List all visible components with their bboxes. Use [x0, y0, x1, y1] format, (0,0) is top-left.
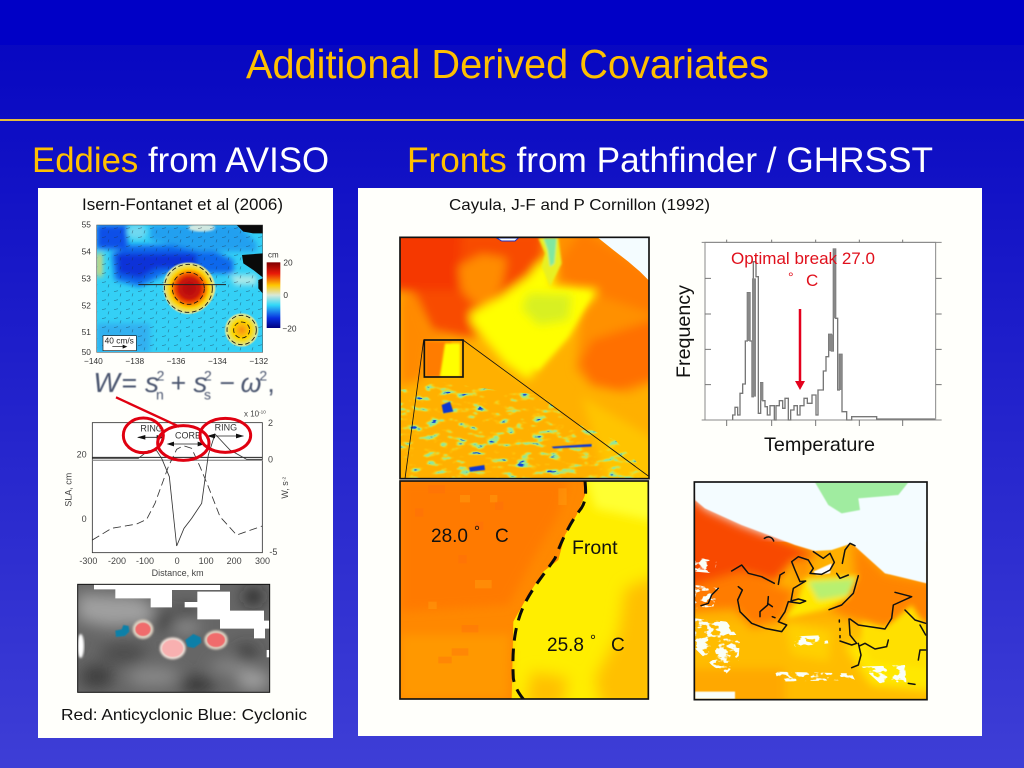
axis label: Temperature: Temperature — [764, 434, 875, 456]
heading: fronts: Fronts from Pathfinder / GHRSST — [407, 141, 933, 180]
front contours — [701, 537, 926, 684]
equation: 2 — [259, 368, 267, 384]
map axis labels: −138 — [125, 356, 144, 366]
profile axes text: -300 — [79, 556, 97, 566]
profile axes text: 0 — [175, 556, 180, 566]
colour bar: 0 — [283, 290, 288, 300]
profile axes text: 0 — [82, 514, 87, 524]
equation: = — [122, 368, 137, 398]
profile axes text: -5 — [269, 547, 277, 557]
chart: fronts map — [694, 481, 928, 700]
profile labels: RING — [215, 423, 237, 433]
map axis labels: −134 — [208, 356, 227, 366]
scale arrow box: 40 cm/s — [105, 335, 134, 345]
title rule — [0, 119, 1024, 121]
zoom guide lines — [405, 340, 648, 479]
red anticyclonic eddies — [133, 620, 153, 639]
blue cyclonic eddies — [115, 625, 129, 637]
chart: front zoom — [400, 475, 658, 708]
blue cold patches — [442, 402, 592, 472]
chart: SST map — [399, 236, 650, 480]
map axis labels: 55 — [82, 220, 91, 230]
equation: s — [204, 386, 211, 402]
label: 25.8 C: ° — [590, 632, 596, 649]
arrow: optimal break — [795, 309, 805, 390]
equation: s — [145, 367, 159, 398]
equation: + — [171, 368, 186, 398]
profile axes text: 2 — [268, 418, 273, 428]
histogram annotation: C — [806, 271, 818, 290]
profile axes text: 0 — [268, 454, 273, 464]
legend caption: Red: Anticyclonic Blue: Cyclonic — [61, 707, 307, 724]
cloud gaps — [695, 558, 906, 684]
chart: grey eddy detection map — [77, 584, 270, 693]
equation: n — [156, 386, 164, 402]
map axis labels: 54 — [82, 247, 91, 257]
chart: temperature histogram — [702, 240, 942, 426]
axis label: Frequency: Frequency — [673, 285, 695, 378]
label: 25.8 C: C — [611, 635, 625, 656]
equation: ω — [241, 368, 261, 398]
profile axes text: 100 — [199, 556, 214, 566]
label: 28.0 C: ° — [474, 523, 480, 540]
colour bar: 20 — [283, 258, 293, 268]
profile axes text: -2 — [281, 477, 287, 481]
profile axes text: 300 — [255, 556, 270, 566]
label: Front: Front — [572, 537, 618, 559]
equation — [93, 367, 275, 402]
map axis labels: 53 — [82, 274, 91, 284]
profile axes text: -10 — [259, 410, 266, 415]
label: 28.0 C: 28.0 — [431, 526, 468, 547]
equation: W — [93, 367, 122, 398]
equation: s — [193, 367, 207, 398]
profile axes text: Distance, km — [152, 568, 204, 578]
profile arrows — [138, 436, 243, 444]
chart: SLA profile — [63, 410, 290, 578]
equation: − — [219, 368, 235, 398]
profile axes text: SLA, cm — [63, 473, 73, 507]
land and sky — [695, 482, 927, 583]
profile axes text: 20 — [77, 449, 87, 459]
velocity arrows — [97, 225, 263, 352]
profile labels — [140, 423, 237, 441]
profile axes text — [63, 410, 290, 578]
map axis labels: 52 — [82, 300, 91, 310]
panel: fronts — [358, 188, 982, 736]
profile axes text: W, s — [280, 481, 290, 499]
red pointer and rings — [116, 397, 251, 460]
label: 25.8 C: 25.8 — [547, 635, 584, 656]
label: 28.0 C: C — [495, 526, 509, 547]
heading: eddies: Eddies from AVISO — [32, 141, 329, 180]
profile axes text: -100 — [136, 556, 154, 566]
map axis labels: 51 — [82, 327, 91, 337]
profile labels: CORE — [175, 431, 201, 441]
profile labels: RING — [140, 424, 163, 434]
dashed front line — [513, 481, 586, 700]
colour bar: −20 — [282, 323, 297, 333]
profile axes text: x 10 — [244, 410, 259, 419]
map axis labels: −140 — [84, 356, 103, 366]
label: 28.0 C — [431, 523, 509, 547]
citation: Cayula: Cayula, J-F and P Cornillon (1992) — [449, 197, 710, 214]
cloud speckle — [400, 380, 649, 479]
zoom box — [424, 340, 463, 377]
scale arrow box — [103, 335, 136, 351]
chart: sea level anomaly map — [82, 220, 297, 402]
label: 25.8 C — [547, 632, 625, 656]
pixel mottling — [438, 625, 478, 664]
panel: eddies — [38, 188, 333, 738]
histogram annotation: Optimal break 27.0 — [731, 249, 875, 268]
equation: , — [267, 368, 275, 398]
land masses — [237, 225, 263, 293]
citation: Isern-Fontanet: Isern-Fontanet et al (2006) — [82, 196, 283, 214]
colour bar — [267, 250, 297, 333]
map axis labels: 50 — [82, 347, 91, 357]
colour bar: cm — [268, 250, 279, 259]
map axis labels — [82, 220, 268, 366]
profile axes text: 200 — [227, 556, 242, 566]
histogram annotation — [731, 249, 875, 290]
title: Additional Derived Covariates — [246, 41, 769, 87]
histogram annotation: ° — [788, 269, 794, 285]
map axis labels: −136 — [167, 356, 186, 366]
map axis labels: −132 — [249, 356, 268, 366]
equation: 2 — [157, 368, 165, 384]
equation: 2 — [204, 368, 212, 384]
profile axes text: -200 — [108, 556, 126, 566]
